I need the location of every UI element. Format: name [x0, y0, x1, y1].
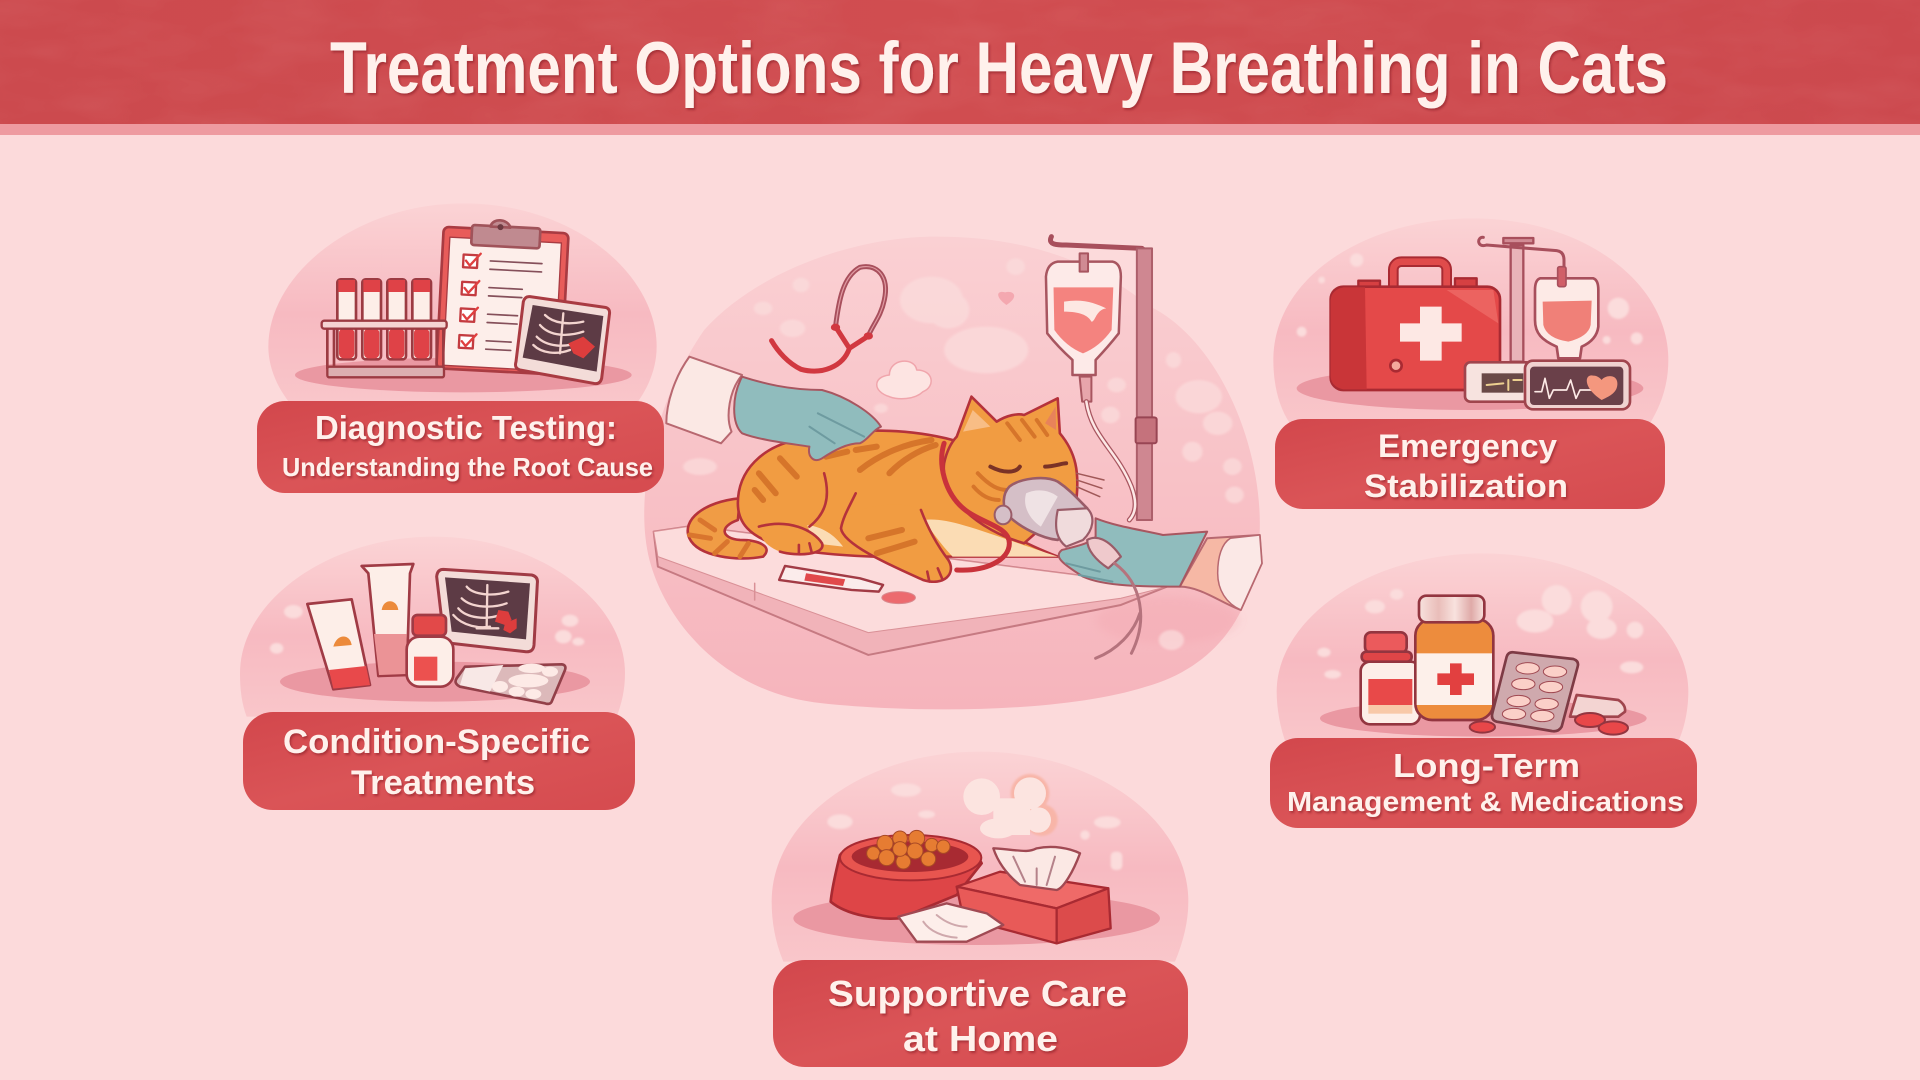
ground shadow: [1297, 367, 1643, 410]
diagnostic label subheading: Understanding the Root Cause: [282, 452, 653, 482]
panel: supportive care at home: [772, 752, 1188, 1067]
ground shadow: [1320, 700, 1647, 737]
emergency label line two: Stabilization: [1364, 468, 1568, 504]
bubble: [1273, 218, 1668, 423]
panel: emergency stabilization: [1273, 218, 1668, 509]
long-term illustration: [1277, 553, 1688, 745]
front leg: [841, 493, 951, 582]
soft clouds and hearts: [683, 258, 1244, 650]
long-term label heading: Long-Term: [1393, 747, 1580, 784]
header band: [0, 0, 1920, 135]
condition label pill: [243, 712, 635, 810]
diagnostic label pill: [257, 401, 664, 493]
steam cloud: [963, 774, 1058, 838]
IV stand: [1479, 237, 1564, 362]
stethoscope: [772, 267, 886, 371]
supportive label pill: [773, 960, 1188, 1067]
x-ray tablet: [515, 297, 610, 384]
small medicine bottle: [1361, 632, 1420, 724]
syringe: [779, 566, 883, 592]
loose capsules: [1470, 713, 1628, 735]
test tubes rack: [322, 279, 447, 377]
back ointment tube: [362, 564, 413, 676]
supportive care illustration: [772, 752, 1188, 962]
condition label line one: Condition-Specific: [283, 723, 590, 761]
tissue box: [957, 872, 1111, 943]
large medicine bottle: [1415, 596, 1493, 720]
food bowl: [831, 830, 982, 919]
central background blob: [644, 237, 1260, 709]
belly: [807, 519, 1058, 557]
IV bag: [1046, 253, 1135, 520]
folded tissue: [898, 903, 1003, 942]
gloved hand holding mask: [1059, 518, 1262, 610]
IV bag: [1535, 267, 1598, 358]
long-term label pill: [1270, 738, 1697, 828]
first aid kit: [1331, 262, 1500, 390]
panel: condition-specific treatments: [240, 537, 635, 810]
ground shadow: [295, 358, 632, 392]
ground shadow: [793, 892, 1160, 945]
front ointment tube: [307, 599, 370, 689]
supportive label line two: at Home: [903, 1018, 1058, 1059]
inner ear and face marks: [963, 407, 1104, 500]
diagnostic label heading: Diagnostic Testing:: [315, 409, 617, 446]
gloved hand on back: [666, 357, 881, 460]
condition label line two: Treatments: [351, 764, 535, 802]
small heart: [998, 292, 1014, 305]
bubble: [1277, 553, 1688, 745]
ground shadow: [280, 662, 590, 702]
long-term label subheading: Management & Medications: [1287, 786, 1684, 817]
title: Treatment Options for Heavy Breathing in Cats: [330, 28, 1668, 109]
bubble: [240, 537, 625, 717]
small monitor: [1465, 362, 1532, 402]
exam table: [654, 526, 1167, 655]
bubble: [772, 752, 1188, 962]
diagnostic illustration: [268, 203, 657, 403]
decorative dots: [270, 605, 584, 654]
condition illustration: [240, 537, 625, 717]
x-ray: [437, 569, 537, 652]
rear paw: [759, 524, 822, 554]
clouds: [1317, 585, 1643, 679]
tissue: [993, 847, 1080, 890]
body stripes and haunch line: [755, 440, 936, 557]
emergency label pill: [1275, 419, 1665, 509]
lower wash: [1096, 597, 1239, 643]
decorative dots: [1297, 253, 1643, 344]
blister pack: [456, 664, 565, 704]
emergency label line one: Emergency: [1378, 428, 1557, 464]
clipboard: [436, 217, 569, 375]
medicine bottle: [407, 615, 453, 687]
cat body: [738, 431, 1058, 557]
IV stand: [1050, 237, 1157, 520]
pill: [882, 592, 915, 604]
pill pack behind: [1570, 695, 1625, 717]
small clouds: [827, 783, 1122, 870]
red stethoscope tube around cat: [942, 443, 1009, 570]
vitals monitor with heart: [1525, 361, 1630, 409]
panel: central illustration of cat receiving oxygen: [644, 237, 1262, 709]
emergency illustration: [1273, 218, 1668, 423]
head: [944, 397, 1077, 543]
oxygen mask: [995, 478, 1141, 658]
panel: long-term management: [1270, 553, 1697, 828]
blister pack: [1492, 652, 1578, 731]
panel: diagnostic testing: [257, 203, 664, 493]
tail: [688, 498, 767, 558]
cloud: [877, 361, 931, 399]
bubble: [268, 203, 657, 403]
supportive label line one: Supportive Care: [828, 973, 1127, 1014]
